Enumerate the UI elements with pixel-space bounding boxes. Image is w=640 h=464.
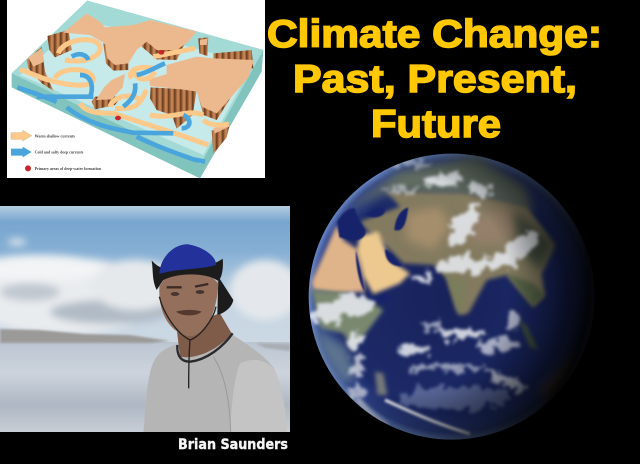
clouds bbox=[312, 159, 544, 410]
distant shore bbox=[0, 329, 170, 343]
neck bbox=[177, 313, 232, 357]
title: Future bbox=[371, 103, 501, 146]
hat flap bbox=[217, 277, 233, 315]
title: Climate Change: bbox=[267, 13, 602, 56]
southern Africa bbox=[313, 327, 357, 385]
panel: ocean currents diagram bbox=[7, 0, 265, 178]
shirt bbox=[143, 333, 287, 432]
legend bbox=[11, 130, 101, 171]
man bbox=[143, 244, 287, 432]
caption: Brian Saunders: Brian Saunders bbox=[178, 437, 288, 453]
title bbox=[267, 13, 602, 146]
Australia bbox=[544, 378, 556, 392]
hat brim bbox=[152, 259, 223, 290]
face bbox=[159, 272, 218, 336]
Earth globe bbox=[308, 153, 595, 440]
legend: Warm shallow currents bbox=[35, 134, 76, 138]
Arabia bbox=[357, 232, 410, 294]
seas bbox=[337, 207, 408, 303]
continents bbox=[28, 13, 254, 133]
title: Past, Present, bbox=[293, 58, 577, 101]
Sumatra bbox=[520, 320, 538, 350]
warm shallow current arrows bbox=[20, 40, 228, 145]
continent cliffs bbox=[27, 30, 253, 154]
hat crown bbox=[159, 244, 216, 274]
chin strap bbox=[159, 297, 216, 388]
legend: Primary areas of deep-water formation bbox=[35, 167, 101, 171]
night-side shading bbox=[308, 153, 595, 440]
clouds bbox=[0, 239, 300, 334]
east Africa bbox=[312, 290, 383, 350]
water bbox=[0, 342, 290, 432]
legend: Cold and salty deep currents bbox=[35, 151, 84, 155]
cloud band, southern ocean bbox=[385, 400, 470, 434]
northern land bbox=[340, 155, 533, 213]
north Africa desert bbox=[312, 225, 365, 293]
cold deep current arrows bbox=[17, 54, 205, 162]
photo: Brian Saunders on the shore bbox=[0, 206, 300, 432]
collar bbox=[177, 333, 233, 362]
Eurasia bbox=[360, 192, 555, 315]
Madagascar bbox=[375, 372, 387, 395]
deep water formation spots bbox=[115, 50, 164, 120]
ocean block bbox=[12, 1, 263, 178]
